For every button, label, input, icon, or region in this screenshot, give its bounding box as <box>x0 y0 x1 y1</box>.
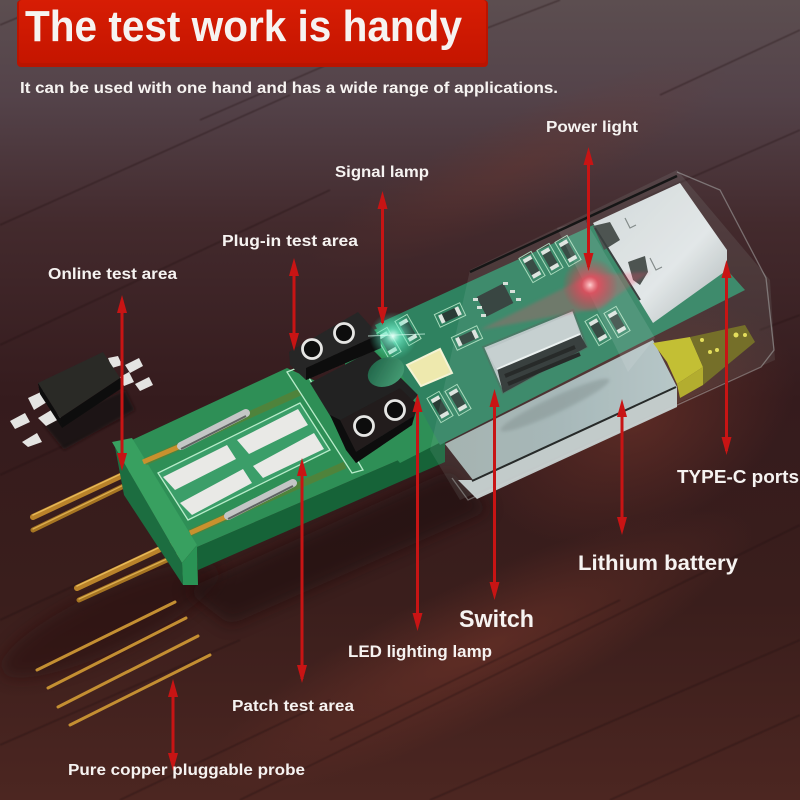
gold slot lines <box>145 392 345 533</box>
lower gold probes <box>77 541 180 600</box>
label: pure copper pluggable probe: Pure copper pluggable probe <box>68 762 305 779</box>
patch pad frame <box>158 403 330 520</box>
label: power light: Power light <box>546 119 639 136</box>
arrow: lithium battery <box>617 399 627 535</box>
SMD components <box>375 235 630 423</box>
arrow: patch test area <box>297 458 307 683</box>
title banner <box>17 0 488 67</box>
arrow: online test area <box>117 295 127 471</box>
slide switch <box>483 310 587 393</box>
USB type-C port <box>593 183 727 323</box>
label: TYPE-C ports: TYPE-C ports <box>677 467 799 487</box>
label: signal lamp: Signal lamp <box>335 164 429 181</box>
black test socket <box>289 312 418 463</box>
label: switch: Switch <box>459 606 534 633</box>
loose SOP chip <box>10 352 153 450</box>
plug-in cutout <box>363 351 409 393</box>
loose copper probes <box>37 602 210 725</box>
arrow: TYPE-C ports <box>722 260 732 455</box>
arrow: switch <box>490 389 500 600</box>
label: online test area: Online test area <box>48 266 177 283</box>
yellow tab <box>653 337 703 384</box>
label: lithium battery: Lithium battery <box>578 552 738 575</box>
transparent shell <box>430 170 775 500</box>
arrow: copper probe <box>168 679 178 771</box>
arrow: power light <box>584 147 594 271</box>
title: The test work is handy <box>25 2 462 51</box>
label: LED lighting lamp: LED lighting lamp <box>348 643 492 661</box>
label: patch test area: Patch test area <box>232 698 354 715</box>
signal lamp glow <box>368 312 425 360</box>
power light glow <box>480 257 650 330</box>
subtitle: It can be used with one hand and has a wide range of applications. <box>20 80 558 97</box>
end cap <box>115 447 183 585</box>
lithium battery <box>445 325 755 499</box>
arrow: signal lamp <box>378 191 388 325</box>
arrow: LED lighting lamp <box>412 394 422 631</box>
board shadow <box>185 470 490 625</box>
socket holes <box>302 324 404 436</box>
arrow: plug-in test area <box>289 258 299 351</box>
label: plug-in test area: Plug-in test area <box>222 233 358 250</box>
test board: green PCB <box>112 300 445 585</box>
patch pads <box>163 409 324 515</box>
upper gold probes <box>33 471 132 530</box>
LED lighting lamp <box>407 349 452 386</box>
silver sleeves <box>143 445 183 462</box>
upper PCB <box>375 195 745 445</box>
